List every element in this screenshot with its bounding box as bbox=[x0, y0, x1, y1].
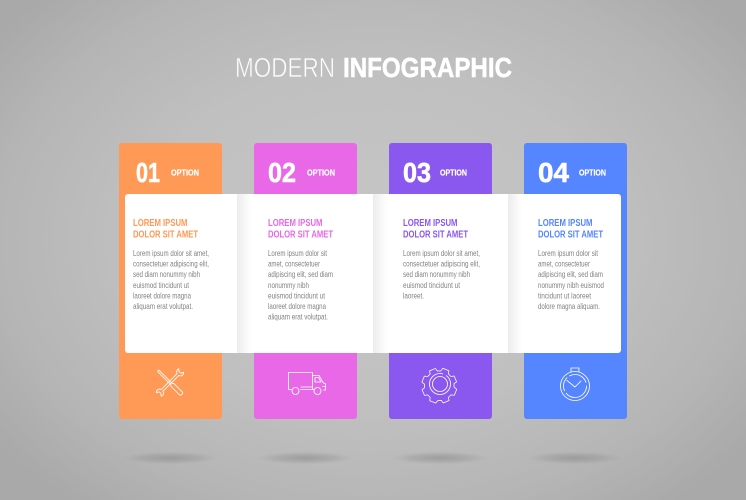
body text 1 bbox=[133, 248, 209, 311]
floor shadow 4 bbox=[525, 452, 625, 464]
body text 2: Lorem ipsum dolor sit bbox=[268, 248, 327, 258]
body text 4: nonummy nibh euismod bbox=[538, 280, 604, 290]
body text 2: adipiscing elit, sed diam bbox=[268, 269, 333, 279]
floor shadow 2 bbox=[255, 452, 355, 464]
body text 1: consectetuer adipiscing elit, bbox=[133, 259, 209, 269]
icon: delivery truck bbox=[288, 372, 326, 394]
body text 4: amet, consectetuer bbox=[538, 259, 590, 269]
heading 4: LOREM IPSUM bbox=[538, 218, 592, 229]
icon: stopwatch bbox=[560, 368, 590, 400]
body text 1: euismod tincidunt ut bbox=[133, 280, 189, 290]
body text 4: Lorem ipsum dolor sit bbox=[538, 248, 598, 258]
heading 2 bbox=[268, 218, 334, 240]
heading 3: LOREM IPSUM bbox=[403, 218, 458, 229]
panel: option 03 column bbox=[389, 143, 492, 419]
heading 2: LOREM IPSUM bbox=[268, 218, 322, 229]
body text 2: aliquam erat volutpat. bbox=[268, 312, 328, 322]
option label 02: OPTION bbox=[307, 168, 335, 178]
body text 2: amet, consectetuer bbox=[268, 259, 320, 269]
body text 1: laoreet dolore magna bbox=[133, 290, 191, 300]
body text 3 bbox=[403, 248, 480, 300]
option label 04: OPTION bbox=[579, 168, 606, 178]
body text 3: euismod tincidunt ut bbox=[403, 280, 460, 290]
body text 3: sed diam nonummy nibh bbox=[403, 269, 470, 279]
fold shading 2 bbox=[237, 194, 251, 353]
body text 3: laoreet. bbox=[403, 290, 424, 300]
body text 3: Lorem ipsum dolor sit amet, bbox=[403, 248, 480, 258]
body text 2: laoreet dolore magna bbox=[268, 301, 326, 311]
heading 3: DOLOR SIT AMET bbox=[403, 230, 469, 240]
heading 1 bbox=[133, 218, 199, 240]
floor shadow 3 bbox=[390, 452, 490, 464]
heading 4: DOLOR SIT AMET bbox=[538, 230, 604, 240]
body text 4: dolore magna aliquam. bbox=[538, 301, 600, 311]
panel: option 04 column bbox=[524, 143, 627, 419]
body text 2: nonummy nibh bbox=[268, 280, 309, 290]
option label 01: OPTION bbox=[171, 168, 199, 178]
body text 1: aliquam erat volutpat. bbox=[133, 301, 193, 311]
body text 3: consectetuer adipiscing elit, bbox=[403, 259, 480, 269]
body text 2 bbox=[268, 248, 333, 322]
icon: crossed wrench and screwdriver bbox=[156, 368, 185, 397]
panel: card 2 text bbox=[237, 194, 373, 353]
number 03: 03 bbox=[403, 157, 431, 188]
title: MODERN bbox=[235, 52, 335, 83]
panel: card 1 text bbox=[125, 194, 237, 353]
panel: card 4 text bbox=[508, 194, 621, 353]
number 01: 01 bbox=[136, 157, 160, 188]
body text 4: tincidunt ut laoreet bbox=[538, 290, 591, 300]
option label 03: OPTION bbox=[440, 168, 467, 178]
heading 1: DOLOR SIT AMET bbox=[133, 230, 199, 240]
number 04: 04 bbox=[538, 157, 569, 188]
body text 1: sed diam nonummy nibh bbox=[133, 269, 200, 279]
body text 4 bbox=[538, 248, 604, 311]
heading 3 bbox=[403, 218, 469, 240]
body text 2: euismod tincidunt ut bbox=[268, 290, 325, 300]
heading 2: DOLOR SIT AMET bbox=[268, 230, 334, 240]
heading 1: LOREM IPSUM bbox=[133, 218, 188, 229]
panel: option 01 column bbox=[119, 143, 222, 419]
title: INFOGRAPHIC bbox=[343, 52, 512, 83]
icon: gear bbox=[417, 363, 462, 408]
floor shadow 1 bbox=[120, 452, 220, 464]
body text 1: Lorem ipsum dolor sit amet, bbox=[133, 248, 209, 258]
fold shading 3 bbox=[373, 194, 387, 353]
heading 4 bbox=[538, 218, 604, 240]
fold shading 4 bbox=[508, 194, 522, 353]
body text 4: adipiscing elit, sed diam bbox=[538, 269, 603, 279]
panel: card 3 text bbox=[373, 194, 508, 353]
panel: option 02 column bbox=[254, 143, 357, 419]
number 02: 02 bbox=[268, 157, 296, 188]
